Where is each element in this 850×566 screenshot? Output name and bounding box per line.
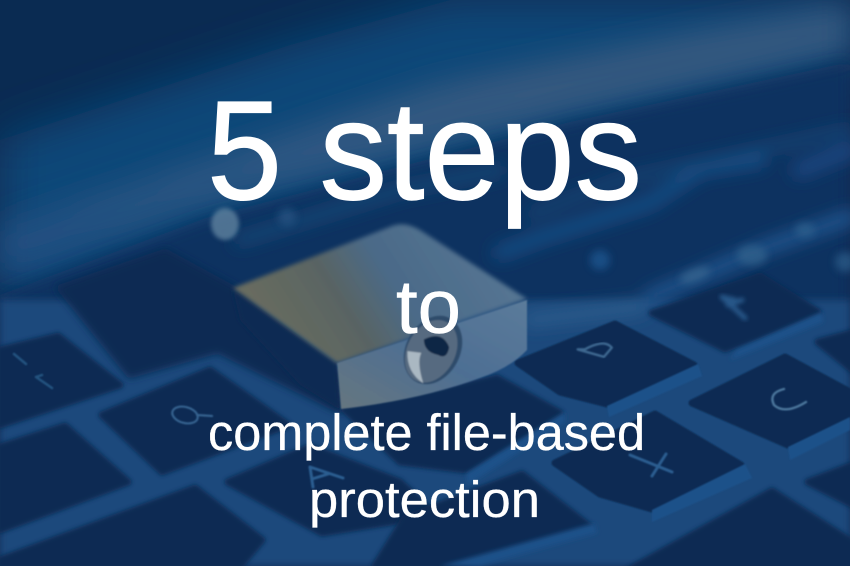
key: shift bottom left	[0, 488, 262, 566]
key: V	[808, 464, 850, 506]
key: A	[228, 447, 435, 533]
padlock top face	[233, 224, 527, 363]
key side: F	[730, 312, 823, 360]
key: Q	[102, 370, 288, 472]
legend: D	[577, 342, 613, 360]
text: protection: protection	[309, 471, 540, 528]
keyboard keys	[0, 252, 850, 566]
key legends	[14, 297, 806, 487]
key side: D	[607, 364, 702, 417]
key side: C	[788, 417, 850, 460]
padlock keyhole	[392, 306, 474, 394]
background: out-of-focus upper keyboard rows	[240, 130, 850, 320]
legend: F	[722, 297, 745, 318]
key side: S	[466, 412, 565, 485]
padlock	[233, 224, 527, 410]
key side: Z	[440, 523, 597, 566]
key: G row right	[818, 332, 850, 372]
key: Z	[375, 474, 590, 566]
title: 5 steps: 5 steps	[207, 71, 642, 229]
key: space bottom right	[630, 491, 850, 566]
key: X	[555, 414, 741, 509]
legend: X	[630, 454, 672, 476]
legend: A	[310, 467, 343, 487]
key: D	[518, 324, 694, 404]
legend: 1	[14, 354, 52, 388]
key: S	[345, 378, 560, 470]
text: complete file-based: complete file-based	[208, 404, 645, 461]
text: to: to	[396, 265, 461, 350]
padlock front face	[337, 300, 527, 409]
key: C	[692, 357, 850, 445]
legend: C	[772, 389, 806, 409]
key: number 1	[0, 336, 120, 425]
key: top-left large key under padlock	[60, 252, 340, 410]
padlock shadow side	[233, 290, 340, 410]
background: bokeh spots	[278, 208, 850, 286]
legend: Q	[170, 404, 212, 426]
key: F	[652, 276, 818, 349]
bokeh highlight	[211, 208, 239, 240]
key: caps lock	[0, 426, 128, 530]
key side: X	[652, 464, 752, 522]
